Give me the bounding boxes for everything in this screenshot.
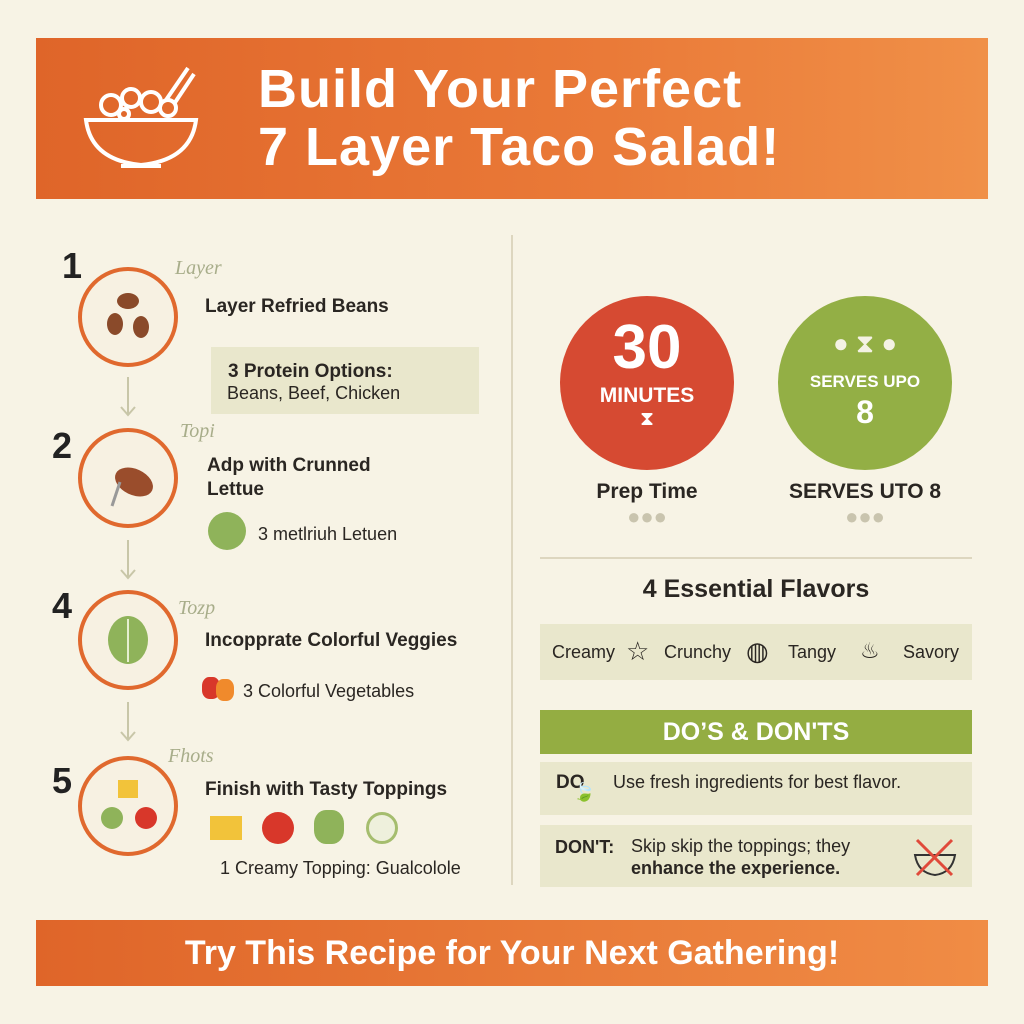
step 5: 1 Creamy Topping: Gualcolole — [220, 858, 461, 878]
step 4: Incopprate Colorful Veggies — [205, 630, 457, 651]
do box: DO — [556, 772, 584, 793]
stat: serves: 8 — [856, 394, 874, 430]
step 4: 3 Colorful Vegetables — [243, 681, 414, 701]
step 1 — [62, 245, 479, 414]
heading: flavors: 4 Essential Flavors — [643, 575, 869, 603]
label: prep time — [596, 480, 698, 529]
label: serves: ●●● — [845, 504, 885, 529]
title: 7 Layer Taco Salad! — [258, 117, 780, 177]
dont box: enhance the experience. — [631, 858, 840, 878]
dos and donts header — [540, 710, 972, 754]
flavors bar — [540, 624, 972, 680]
stat: serves: SERVES UPO — [810, 372, 920, 391]
dont box: Skip skip the toppings; they — [631, 836, 850, 856]
footer banner: Try This Recipe for Your Next Gathering! — [185, 934, 839, 972]
step 1: Layer — [175, 257, 222, 279]
title: Build Your Perfect — [258, 59, 742, 119]
step 1: 1 — [62, 245, 82, 286]
stat: prep time: MINUTES — [600, 384, 694, 407]
icon: peppers — [202, 677, 234, 701]
flavors bar: Savory — [903, 642, 959, 662]
arrow — [120, 377, 136, 416]
arrow — [120, 540, 136, 580]
do box: Use fresh ingredients for best flavor. — [613, 772, 901, 792]
divider — [511, 235, 513, 885]
flavors bar: ☆ — [626, 636, 649, 666]
dont box — [540, 825, 972, 887]
icon: lettuce — [208, 512, 246, 550]
step 1: Layer Refried Beans — [205, 296, 389, 317]
step 2: 3 metlriuh Letuen — [258, 524, 397, 544]
icon: beans — [78, 267, 178, 367]
step 2: Adp with Crunned — [207, 455, 371, 476]
step 2 — [52, 420, 397, 550]
label: serves — [789, 480, 941, 529]
footer banner — [36, 920, 988, 986]
step 5: Finish with Tasty Toppings — [205, 779, 447, 800]
stat: prep time: ⧗ — [640, 408, 654, 430]
step 5: Fhots — [168, 745, 214, 767]
step 5: 5 — [52, 760, 72, 801]
stat: prep time — [560, 296, 734, 470]
stat: serves: ● ⧗ ● — [833, 328, 897, 358]
stat: serves — [778, 296, 952, 470]
flavors bar: ◍ — [746, 636, 769, 666]
step 5 — [52, 745, 461, 878]
flavors bar: Tangy — [788, 642, 836, 662]
icon: toppings — [78, 756, 178, 856]
step 4: 4 — [52, 585, 72, 626]
title — [258, 59, 780, 177]
icon: salad bowl — [84, 66, 198, 168]
label: prep time: ●●● — [627, 504, 667, 529]
do box — [540, 762, 972, 815]
icon: meat — [78, 428, 178, 528]
flavors bar: Crunchy — [664, 642, 731, 662]
arrow — [120, 702, 136, 742]
step 4 — [52, 585, 457, 701]
step 2: Topi — [180, 420, 215, 442]
header banner — [36, 38, 988, 199]
do box: 🍃 — [573, 782, 595, 802]
dos and donts header: DO’S & DON'TS — [663, 718, 849, 746]
label: prep time: Prep Time — [596, 480, 698, 503]
callout: protein options: Beans, Beef, Chicken — [227, 383, 400, 403]
icons: topping row — [210, 810, 398, 844]
flavors bar: ♨ — [860, 638, 880, 663]
icon: lettuce — [78, 590, 178, 690]
icon: crossed bowl — [914, 839, 956, 876]
callout: protein options: 3 Protein Options: — [228, 361, 393, 382]
label: serves: SERVES UTO 8 — [789, 480, 941, 503]
step 2: 2 — [52, 425, 72, 466]
callout: protein options — [211, 347, 479, 414]
stat: prep time: 30 — [613, 313, 681, 382]
dont box: DON'T: — [555, 837, 614, 857]
step 2: Lettue — [207, 479, 264, 500]
step 4: Tozp — [178, 597, 215, 619]
flavors bar: Creamy — [552, 642, 615, 662]
